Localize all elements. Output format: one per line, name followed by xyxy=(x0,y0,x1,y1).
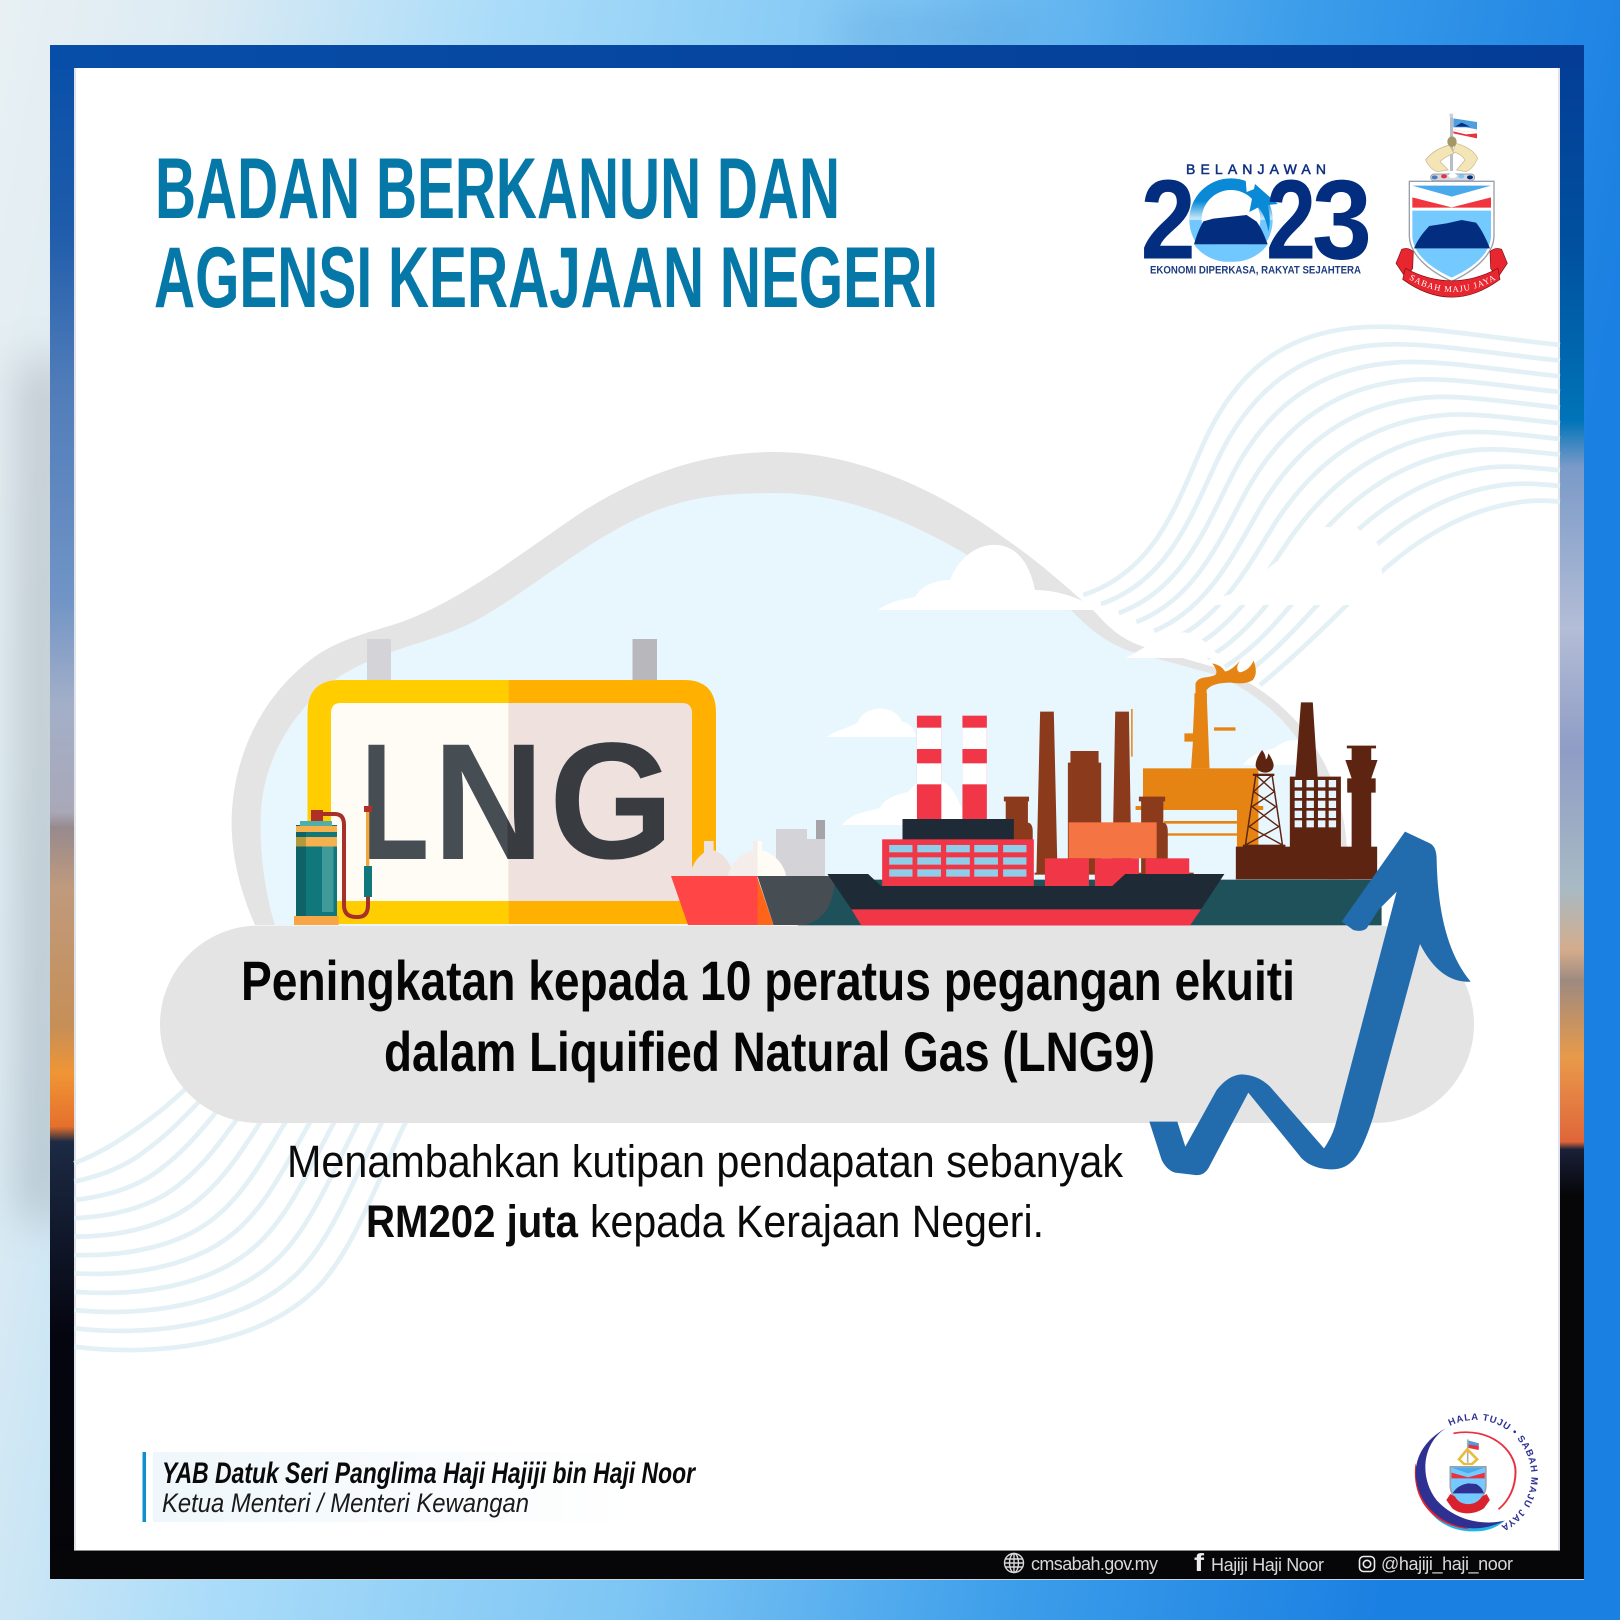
body text xyxy=(287,1136,1123,1247)
name block: Ketua Menteri / Menteri Kewangan xyxy=(162,1488,529,1518)
logo: Sabah coat of arms: SABAH MAJU JAYA xyxy=(1410,274,1496,292)
tanker with domes xyxy=(671,820,834,925)
wave lines: bottom left xyxy=(74,1087,407,1350)
orange block and containers xyxy=(1069,822,1157,858)
blob backdrop xyxy=(232,452,1347,925)
title: AGENSI KERAJAAN NEGERI xyxy=(154,230,938,326)
footer social bar: Hajiji Haji Noor xyxy=(1211,1555,1324,1575)
icon: instagram xyxy=(1360,1556,1374,1572)
logo: Belanjawan 2023: BELANJAWAN xyxy=(1186,161,1326,177)
grey text banner xyxy=(160,926,1474,1123)
ship, industrial scene xyxy=(798,661,1382,925)
LNG sign: L xyxy=(361,710,429,895)
body text: kepada Kerajaan Negeri. xyxy=(590,1196,1044,1247)
logo: Belanjawan 2023: 2 xyxy=(1266,156,1316,283)
banner text: dalam Liquified Natural Gas (LNG9) xyxy=(384,1020,1155,1083)
clouds xyxy=(827,527,1384,825)
name block xyxy=(142,1452,697,1522)
cargo ship xyxy=(827,716,1224,926)
orange offshore platform xyxy=(1131,661,1263,848)
footer social bar xyxy=(74,1549,1584,1580)
banner text xyxy=(241,949,1295,1083)
LNG sign: G xyxy=(549,709,674,894)
emblem: Hala Tuju Sabah Maju Jaya: HALA TUJU • SABAH MAJU JAYA xyxy=(1448,1414,1538,1530)
LNG sign: N xyxy=(433,710,544,895)
rising arrow xyxy=(1149,832,1471,1175)
footer social bar: cmsabah.gov.my xyxy=(1031,1554,1158,1574)
title: BADAN BERKANUN DAN xyxy=(155,141,840,237)
frame shadow xyxy=(22,18,1030,1220)
banner text: Peningkatan kepada 10 peratus pegangan ekuiti xyxy=(241,949,1295,1012)
logo: Belanjawan 2023 xyxy=(1141,156,1372,283)
LNG sign xyxy=(308,639,716,924)
body text: RM202 juta xyxy=(366,1196,579,1247)
refinery windows xyxy=(1295,780,1336,827)
brown stacks xyxy=(1004,712,1194,875)
name block: YAB Datuk Seri Panglima Haji Hajiji bin Haji Noor xyxy=(162,1457,697,1490)
footer social bar: f xyxy=(1194,1549,1205,1577)
title xyxy=(154,141,938,326)
logo: Belanjawan 2023: 3 xyxy=(1312,156,1372,283)
logo: Sabah coat of arms xyxy=(1396,113,1508,298)
icon: globe xyxy=(1004,1554,1024,1572)
refinery silhouette xyxy=(1236,702,1378,879)
teal shore xyxy=(798,880,1382,925)
wave lines: top right xyxy=(1083,327,1560,685)
body text: Menambahkan kutipan pendapatan sebanyak xyxy=(287,1136,1123,1187)
logo: Belanjawan 2023: EKONOMI DIPERKASA, RAKYAT SEJAHTERA xyxy=(1150,264,1361,276)
footer social bar: @hajiji_haji_noor xyxy=(1381,1554,1513,1575)
logo: Belanjawan 2023: 2 xyxy=(1141,156,1196,283)
gas cylinder with hose xyxy=(294,806,372,925)
